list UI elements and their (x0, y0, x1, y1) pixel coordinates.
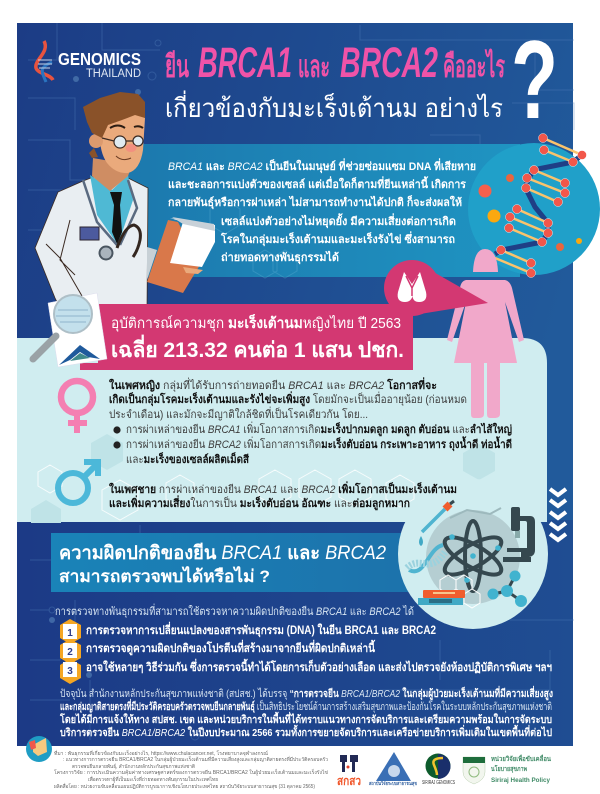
heading band: can BRCA abnormality be detected: ความผิดปกติของยีน BRCA1 และ BRCA2 (59, 542, 386, 564)
text block: BRCA intro: BRCA1 และ BRCA2 เป็นยีนในมนุษย์ ที่ช่วยซ่อมแซม DNA ที่เสียหาย (168, 158, 476, 174)
text block: NHSO coverage (59, 685, 553, 739)
illustration: lab circle (398, 479, 548, 629)
text block: female: และมะเร็งของเซลล์ผลิตเม็ดสี (126, 452, 249, 466)
report roof graphic (59, 345, 100, 365)
title (165, 39, 505, 123)
text block: NHSO coverage: ปัจจุบัน สำนักงานหลักประกันสุขภาพแห่งชาติ (สปสช.) ได้บรรจุ “การตรวจยีน BRCA1/BRCA2 ในกลุ่มผู้ป่วยมะเร็งเต้านมที่มีความเสี่ยงสูง (60, 685, 553, 701)
badge 2: 2 (67, 647, 73, 658)
text block: Siriraj Health Policy unit: นโยบายสุขภาพ (491, 764, 527, 773)
magnifier lens (54, 295, 92, 333)
badge 3 (60, 659, 81, 684)
bullets (113, 426, 121, 449)
icon: pointing hand badge (26, 736, 52, 762)
list: test methods (60, 619, 552, 684)
text block: BRCA intro: เซลล์แบ่งตัวอย่างไม่หยุดยั้ง มีความเสี่ยงต่อการเกิด (221, 213, 456, 229)
text block: male (109, 481, 457, 511)
icon: male symbol (58, 462, 98, 503)
banner: breast cancer statistic: อุบัติการณ์ความชุก มะเร็งเต้านมหญิงไทย ปี 2563 (111, 313, 401, 332)
logo: Siriraj Genomics: SIRIRAJ GENOMICS (422, 780, 455, 786)
neck and face (92, 158, 132, 191)
books (418, 590, 465, 605)
text block: BRCA intro: ถ่ายทอดทางพันธุกรรมได้ (221, 250, 339, 265)
illustration: report under magnifier (33, 293, 107, 367)
logo: Genomics Thailand: GENOMICS (58, 49, 141, 69)
text block: BRCA intro: กลายพันธุ์หรือการผ่าเหล่า ไม่สามารถทำงานได้ปกติ ก็จะส่งผลให้ (168, 195, 462, 210)
stethoscope (117, 225, 140, 257)
coat (35, 176, 148, 312)
logo: health systems institute (369, 752, 417, 787)
title: ยีน (165, 49, 189, 84)
clipboard (147, 220, 200, 293)
panel: teal intro band (120, 143, 600, 278)
molecule (488, 570, 527, 607)
badge 3: 3 (67, 666, 73, 677)
text block: female: การผ่าเหล่าของยีน BRCA1 เพิ่มโอกาสการเกิดมะเร็งปากมดลูก มดลูก ตับอ่อน และลำไส้ใหญ่ (126, 421, 512, 437)
glasses (102, 136, 143, 148)
text block: female: การผ่าเหล่าของยีน BRCA2 เพิ่มโอกาสการเกิดมะเร็งตับอ่อน กระเพาะอาหาร ถุงน้ำดี ท่อน้ำดี (126, 436, 512, 452)
text block: references: เพื่อตรวจหาผู้ที่เป็นมะเร็งที่ถ่ายทอดทางพันธุกรรมในประเทศไทย (88, 775, 218, 783)
brows, nose, mouth (110, 126, 143, 128)
text block: references: ที่มา : พันธุกรรมที่เกี่ยวข้องกับมะเร็งอย่างไร, https://www.chulacancer.net, โรงพยาบาลจุฬาลงกรณ์ (54, 749, 268, 757)
list: test methods: การตรวจหาการเปลี่ยนแปลงของสารพันธุกรรม (DNA) ในยีน BRCA1 และ BRCA2 (86, 621, 436, 638)
shirt and tie (90, 175, 133, 245)
illustration: woman silhouette (447, 249, 524, 418)
dropper (419, 501, 454, 546)
text block: references: ตรวจพบยีนกลายพันธุ์, สำนักงานหลักประกันสุขภาพแห่งชาติ (72, 763, 195, 770)
speech bubble: breast icon (384, 260, 488, 316)
name badge (80, 227, 99, 240)
badge 1 (60, 619, 81, 644)
logo: Genomics Thailand (36, 41, 141, 82)
logo: health systems institute: สถาบันวิจัยระบบสาธารณสุข (369, 780, 417, 787)
icon: chevrons (550, 489, 566, 540)
badge 2 (60, 639, 81, 664)
text block: references: โครงการวิจัย : การประเมินความคุ้มค่าทางเศรษฐศาสตร์ของการตรวจยีน BRCA1/BRCA2 ในผู้ป่วยมะเร็งเต้านมและมะเร็งรังไข่ (54, 768, 328, 776)
hexagon chemistry lines (440, 575, 480, 608)
text block: BRCA intro: โรคในกลุ่มมะเร็งเต้านมและมะเร็งรังไข่ ซึ่งสามารถ (220, 231, 455, 247)
bra icon (398, 272, 426, 302)
heading band: can BRCA abnormality be detected (51, 533, 416, 592)
microscope (503, 507, 535, 562)
logo: TSRI: สกสว (337, 774, 361, 788)
logo: TSRI (337, 755, 361, 788)
text block: references: : แนวทางการการตรวจยีน BRCA1/BRCA2 ในกลุ่มผู้ป่วยมะเร็งเต้านมที่มีความเสี่ยงสูงและกลุ่มญาติสายตรงที่มีประวัติครอบครัว (63, 755, 328, 763)
title: เกี่ยวข้องกับมะเร็งเต้านม อย่างไร (165, 90, 503, 123)
title: BRCA1 (198, 39, 292, 87)
illustration: doctor (35, 92, 215, 312)
text block: female: เกิดเป็นกลุ่มโรคมะเร็งเต้านมและรังไข่จะเพิ่มสูง โดยมักจะเป็นเมื่ออายุน้อย (ก่อนหมด (109, 391, 467, 407)
text block: BRCA intro (168, 158, 476, 265)
text block: Siriraj Health Policy unit: หน่วยวิจัยเพื่อขับเคลื่อน (491, 753, 552, 763)
panel: light content area (17, 338, 547, 522)
logo: Genomics Thailand: THAILAND (86, 68, 141, 80)
decorative hex icons in the light panel (31, 434, 495, 523)
heading band: can BRCA abnormality be detected: สามารถตรวจพบได้หรือไม่ ? (59, 566, 270, 586)
banner: breast cancer statistic (80, 304, 413, 370)
text block: Siriraj Health Policy unit: Siriraj Health Policy (491, 777, 550, 784)
text block: references (54, 749, 328, 790)
icon: question mark: ? (511, 18, 558, 142)
atom icon (440, 521, 506, 591)
text block: female (109, 377, 512, 466)
molecule network (450, 508, 501, 518)
text block: female: ประจำเดือน) และมักจะมีญาติใกล้ชิดที่เป็นโรคเดียวกัน โดย... (109, 406, 368, 421)
logo: Siriraj Health Policy shield (463, 757, 485, 784)
small DNA (407, 545, 445, 571)
logo: Siriraj Genomics (422, 754, 455, 786)
title: BRCA2 (340, 39, 438, 87)
text block: male: ในเพศชาย การผ่าเหล่าของยีน BRCA1 และ BRCA2 เพิ่มโอกาสเป็นมะเร็งเต้านม (109, 481, 457, 496)
text block: test intro: การตรวจทางพันธุกรรมที่สามารถใช้ตรวจหาความผิดปกติของยีน BRCA1 และ BRCA2 ได้ (55, 603, 414, 618)
lapels (83, 180, 137, 245)
text block: male: และเพิ่มความเสี่ยงในการเป็น มะเร็งตับอ่อน อัณฑะ และต่อมลูกหมาก (109, 495, 410, 511)
text block: references: ผลิตสื่อโดย : หน่วยงานขับเคลื่อนแผนปฏิบัติการบูรณาการเชิงนโยบายประเทศไทย สถาบันวิจัยระบบสาธารณสุข (31 ตุลาคม 2565) (54, 783, 315, 790)
text block: Siriraj Health Policy unit (491, 753, 552, 784)
magnifier handle (33, 336, 56, 359)
text block: female: ในเพศหญิง กลุ่มที่ได้รับการถ่ายทอดยีน BRCA1 และ BRCA2 โอกาสที่จะ (109, 377, 437, 392)
illustration: DNA helix (478, 134, 586, 278)
title: และ (298, 49, 330, 84)
banner: breast cancer statistic: เฉลี่ย 213.32 คนต่อ 1 แสน ปชก. (111, 334, 404, 362)
text block: BRCA intro: และชะลอการแบ่งตัวของเซลล์ แต่เมื่อใดก็ตามที่ยีนเหล่านี้ เกิดการ (168, 176, 466, 191)
icon: female symbol (61, 381, 93, 433)
list: test methods: การตรวจดูความผิดปกติของโปรตีนที่สร้างมาจากยีนที่ผิดปกติเหล่านี้ (86, 639, 376, 656)
sleeve lines (46, 220, 82, 296)
helix mark (36, 41, 53, 82)
text block: NHSO coverage: บริการตรวจยีน BRCA1/BRCA2 ในปีงบประมาณ 2566 รวมทั้งการขยายจัดบริการและเครือข่ายบริการเพิ่มเติมในเขตพื้นที่ต่อไป (60, 724, 552, 739)
badge 1: 1 (67, 628, 73, 639)
hair (83, 92, 145, 158)
title: คืออะไร (443, 48, 505, 84)
